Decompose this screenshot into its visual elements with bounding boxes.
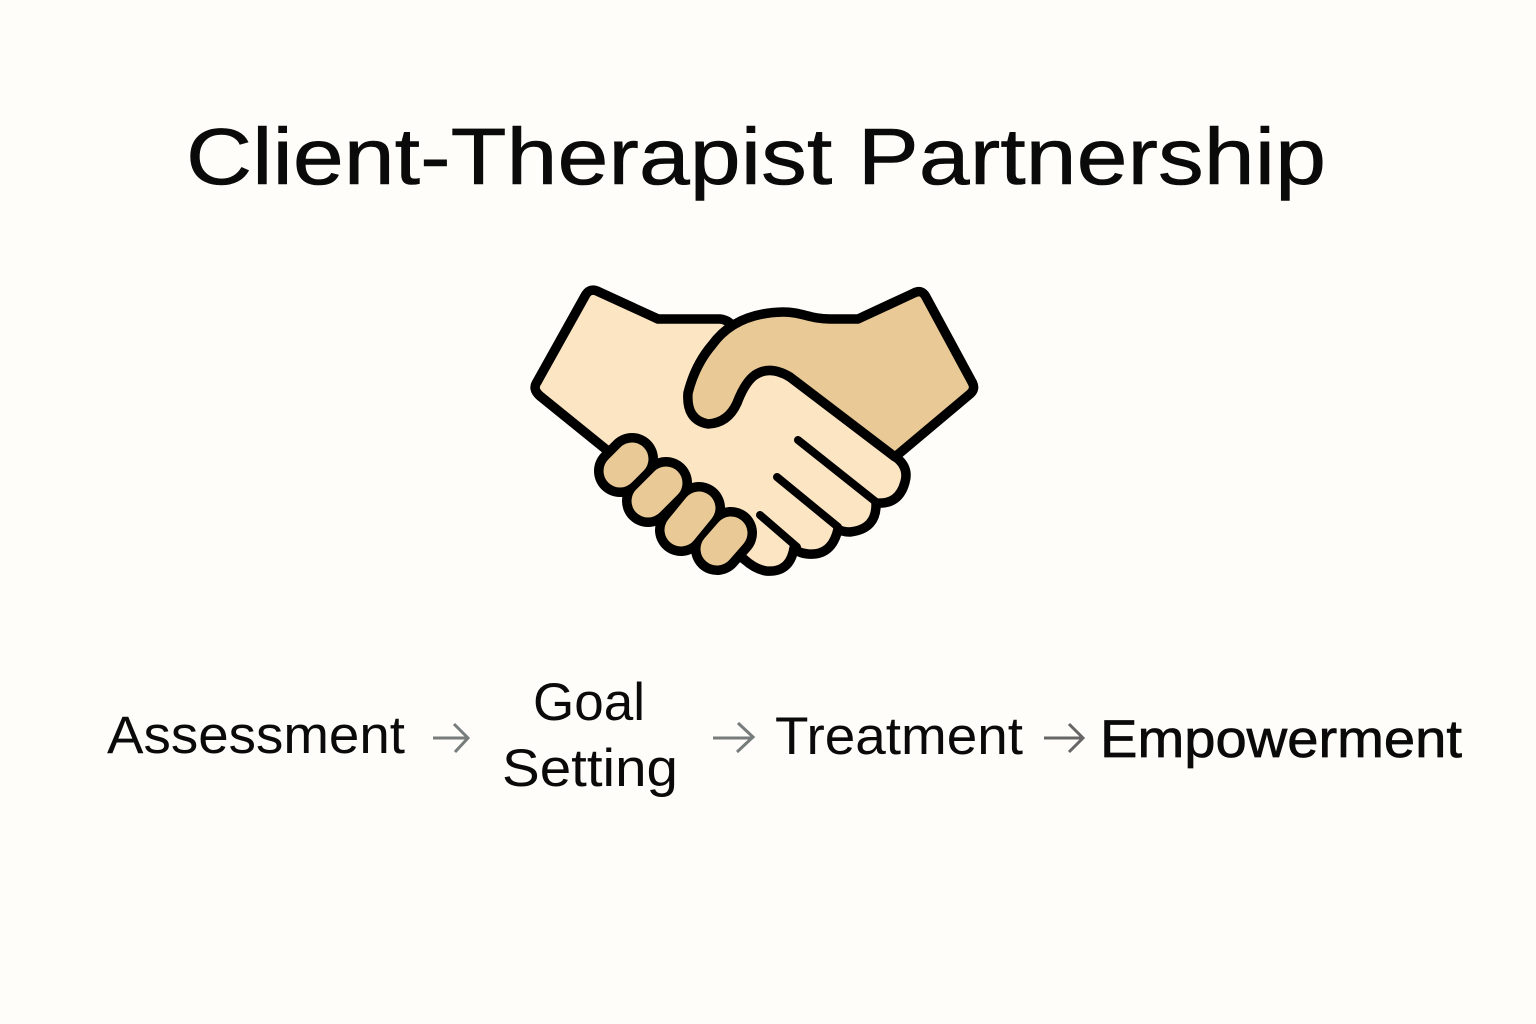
dark hand (688, 292, 974, 457)
arrow: Assessment to Goal Setting (433, 724, 468, 752)
step: Empowerment: Empowerment (1100, 710, 1462, 769)
step: Goal Setting: Goal (533, 673, 645, 732)
light hand (535, 290, 906, 571)
step: Treatment: Treatment (775, 707, 1023, 766)
finger lines (760, 440, 876, 547)
step: Assessment: Assessment (107, 706, 405, 765)
arrow: Goal Setting to Treatment (713, 723, 753, 752)
step: Goal Setting (502, 673, 678, 798)
finger fills (620, 459, 731, 549)
icon: handshake (535, 290, 974, 571)
finger outlines (620, 459, 731, 549)
process flow (107, 673, 1462, 798)
arrow: Treatment to Empowerment (1044, 724, 1083, 752)
dark hand fingers (620, 459, 731, 549)
title: Client-Therapist Partnership (186, 112, 1326, 201)
step: Goal Setting: Setting (502, 739, 678, 798)
